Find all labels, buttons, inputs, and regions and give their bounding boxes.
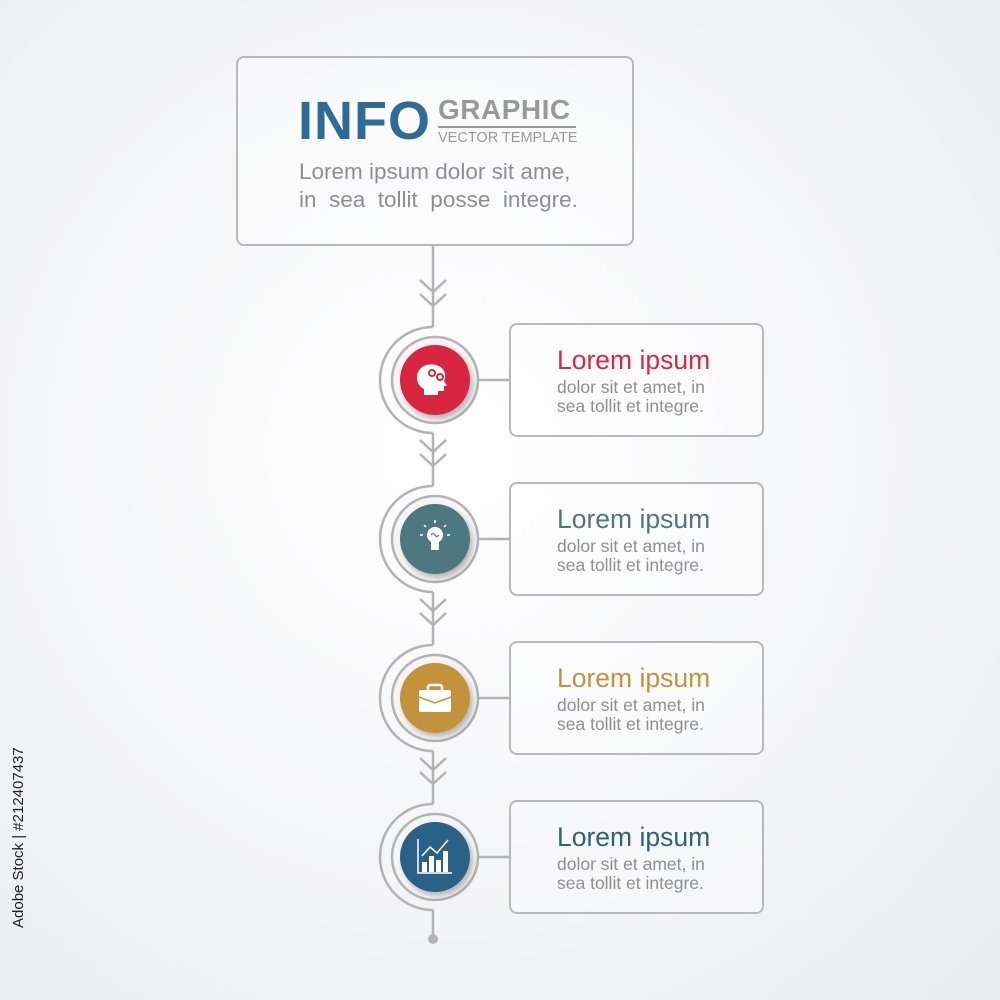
node 4 xyxy=(380,804,509,910)
watermark id: Adobe Stock | #212407437 xyxy=(10,747,27,928)
title box xyxy=(236,56,634,246)
text xyxy=(557,695,705,734)
end dot xyxy=(428,934,438,944)
heading: Lorem ipsum xyxy=(557,663,710,693)
text: dolor sit et amet, in xyxy=(557,854,705,874)
text: sea tollit et integre. xyxy=(557,396,704,416)
panel: step 3 xyxy=(509,641,764,755)
heading: Lorem ipsum xyxy=(557,504,710,534)
text xyxy=(557,854,705,893)
text: sea tollit et integre. xyxy=(557,714,704,734)
subtitle: VECTOR TEMPLATE: VECTOR TEMPLATE xyxy=(438,130,577,146)
title: INFO: INFO xyxy=(298,91,431,151)
description: in sea tollit posse integre. xyxy=(299,187,578,212)
text: dolor sit et amet, in xyxy=(557,536,705,556)
text xyxy=(557,377,705,416)
description xyxy=(299,159,578,212)
text: sea tollit et integre. xyxy=(557,873,704,893)
title: GRAPHIC: GRAPHIC xyxy=(438,94,571,125)
node 2 xyxy=(380,486,509,592)
main vertical line xyxy=(432,245,434,938)
panel: step 2 xyxy=(509,482,764,596)
description: Lorem ipsum dolor sit ame, xyxy=(299,159,570,184)
icon: bar chart xyxy=(418,839,452,873)
text: sea tollit et integre. xyxy=(557,555,704,575)
panel: step 4 xyxy=(509,800,764,914)
heading: Lorem ipsum xyxy=(557,345,710,375)
text: dolor sit et amet, in xyxy=(557,695,705,715)
icon: head with gears xyxy=(417,364,447,395)
text: dolor sit et amet, in xyxy=(557,377,705,397)
icon: light bulb xyxy=(420,520,450,550)
text xyxy=(557,536,705,575)
heading: Lorem ipsum xyxy=(557,822,710,852)
panel: step 1 xyxy=(509,323,764,437)
icon: briefcase xyxy=(419,685,451,712)
node 3 xyxy=(380,645,509,751)
node 1 xyxy=(380,327,509,433)
chevrons xyxy=(420,280,446,784)
